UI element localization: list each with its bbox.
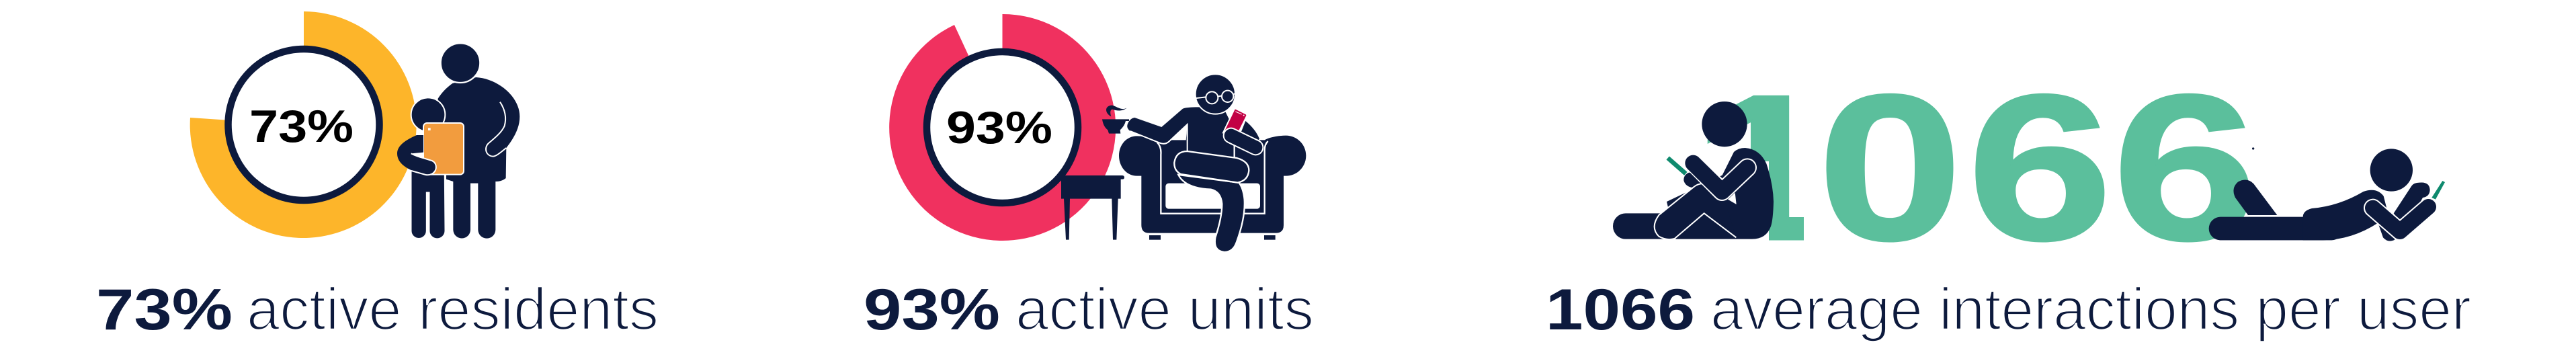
- crossed leg: [1178, 175, 1245, 252]
- caption: 93% active units: 93%: [864, 278, 1000, 342]
- donut chart: 73%: 73%: [249, 101, 354, 152]
- phone: [1223, 109, 1247, 132]
- head with glasses: [1196, 74, 1235, 114]
- panel: active residents: [96, 11, 659, 342]
- donut chart: 73%: [190, 11, 417, 238]
- icon: adult and child with tablet: [397, 43, 520, 239]
- coffee cup and steam: [1102, 119, 1129, 134]
- torso and arm: [1232, 121, 1259, 155]
- forearm: [1231, 136, 1255, 147]
- side table: [1061, 175, 1124, 240]
- armchair: [1119, 136, 1306, 233]
- donut chart: 93%: 93%: [946, 102, 1052, 153]
- phone: [1668, 158, 1686, 173]
- big number: 1066: [1707, 93, 2249, 242]
- caption: 1066 average interactions per user: average interactions per user: [1710, 276, 2471, 342]
- caption: 1066 average interactions per user: 1066: [1546, 278, 1695, 342]
- caption: 93% active units: [864, 276, 1314, 342]
- caption: 73% active residents: 73%: [96, 278, 233, 342]
- panel: average interactions: [1550, 93, 2469, 341]
- big number: 1066: 0: [1817, 52, 1963, 284]
- panel: active units: [864, 14, 1314, 342]
- big number: 1066: 6: [2112, 52, 2258, 284]
- donut chart: 93%: [889, 14, 1116, 241]
- big number: 1066: 1: [1691, 52, 1837, 284]
- icon: person lying with phone: [2209, 147, 2445, 241]
- big number: 1066: 6: [1967, 52, 2113, 284]
- icon: person in armchair with coffee, phone and side table: [1061, 74, 1306, 252]
- icon: person sitting with phone: [1613, 102, 1774, 239]
- caption: 93% active units: active units: [1015, 276, 1314, 342]
- caption: 73% active residents: active residents: [247, 276, 659, 342]
